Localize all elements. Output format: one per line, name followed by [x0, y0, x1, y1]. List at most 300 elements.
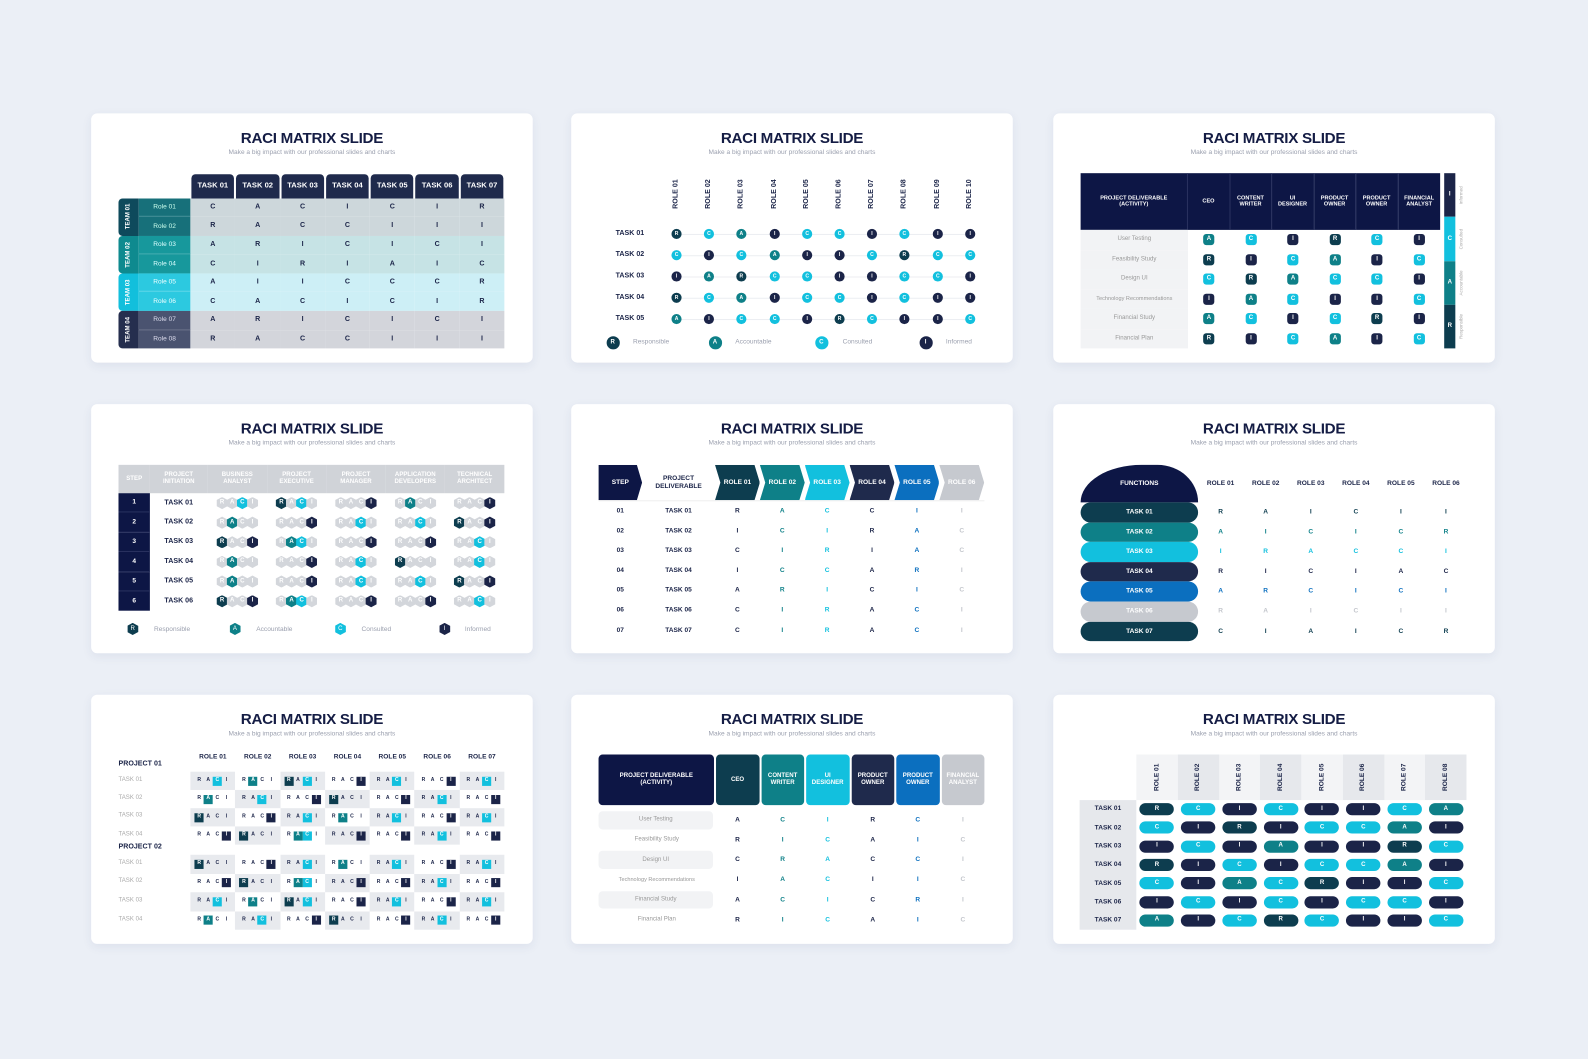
table: C	[418, 539, 423, 545]
project 02 grid: A	[341, 898, 345, 904]
task header row: TASK 01	[197, 181, 228, 190]
project 01 grid: C	[395, 777, 399, 783]
project 01 grid: I	[316, 795, 317, 801]
project 01 grid: C	[305, 832, 309, 838]
project 01 grid: C	[485, 795, 488, 801]
project 02 grid: R	[287, 916, 291, 922]
project 01 grid: A	[206, 777, 210, 783]
table: R	[1375, 315, 1379, 321]
project 01 grid: R	[287, 832, 291, 838]
project 02 grid: A	[296, 860, 300, 866]
title	[709, 130, 876, 156]
title	[709, 711, 876, 737]
table body: C	[870, 507, 874, 515]
table: 4	[132, 558, 136, 565]
dot grid: I	[937, 295, 939, 301]
pills	[1139, 803, 1464, 927]
project 02 grid: R	[466, 898, 470, 904]
project 02 grid: I	[450, 879, 452, 885]
project 01 grid: I	[226, 832, 227, 838]
project 02 grid: C	[216, 860, 219, 866]
matrix body: A	[210, 316, 215, 323]
legend: Informed	[946, 338, 972, 345]
table: 3	[132, 538, 136, 545]
project 01 grid: R	[197, 813, 201, 819]
table: A	[467, 500, 472, 506]
table body: I	[916, 507, 918, 515]
pills: I	[1197, 824, 1199, 830]
table: OWNER	[1366, 202, 1387, 208]
legend: I	[444, 626, 445, 632]
header: PROJECT DELIVERABLE	[620, 773, 693, 779]
project 01 grid: A	[296, 795, 300, 801]
project 02 grid: I	[495, 916, 496, 922]
matrix body: C	[390, 297, 395, 305]
table: A	[230, 500, 234, 506]
table: ANALYST	[223, 479, 251, 485]
project 02 grid: A	[296, 916, 300, 922]
table body: C	[735, 607, 740, 614]
table: TASK 05	[164, 578, 193, 585]
title: RACI MATRIX SLIDE	[241, 130, 383, 147]
table: R	[279, 500, 284, 506]
project 02 grid: R	[332, 916, 336, 922]
table	[118, 464, 504, 611]
functions column: TASK 04	[1126, 568, 1153, 575]
project 01 grid: I	[495, 777, 496, 783]
dot grid: A	[675, 316, 678, 322]
title: Make a big impact with our professional slides and charts	[709, 440, 875, 447]
role headers: ROLE 06	[836, 180, 843, 209]
project 01 grid: R	[377, 832, 380, 838]
table: A	[467, 598, 472, 604]
legend: C	[819, 339, 824, 345]
dot grid: I	[774, 295, 775, 301]
project 02 grid: A	[206, 879, 210, 885]
table: R	[457, 500, 462, 506]
task labels: TASK 05	[1095, 880, 1121, 887]
pills: C	[1279, 806, 1283, 812]
project 02 grid: C	[216, 898, 219, 904]
legend: Informed	[465, 626, 491, 633]
role table: R	[1263, 548, 1268, 555]
body: Feasibility Study	[635, 837, 679, 843]
body: Design UI	[642, 857, 669, 863]
project 02 grid: I	[226, 898, 227, 904]
task header row: TASK 07	[467, 181, 497, 190]
table: PROJECT DELIVERABLE	[1100, 195, 1167, 201]
table: C	[299, 598, 304, 604]
table: A	[289, 578, 294, 584]
table: A	[408, 519, 412, 525]
project 02 grid: C	[260, 898, 264, 904]
table: A	[1207, 315, 1211, 321]
project 02 grid: I	[316, 898, 317, 904]
role headers: ROLE 03	[738, 180, 745, 209]
project 01 grid: C	[260, 813, 264, 819]
body: I	[737, 876, 738, 883]
matrix body: R	[479, 279, 485, 286]
table body: 07	[617, 627, 624, 634]
role table: C	[1399, 628, 1403, 635]
project 02 grid: A	[386, 860, 390, 866]
panel: colored header matrix	[571, 695, 1013, 944]
task header row: TASK 05	[377, 181, 408, 190]
project 02 grid: R	[242, 860, 246, 866]
table: C	[418, 519, 423, 525]
body: I	[917, 836, 919, 843]
matrix body: R	[479, 297, 485, 305]
project 02 grid: R	[422, 898, 425, 904]
project 02 grid: C	[305, 898, 309, 904]
role headers: ROLE 03	[1236, 764, 1243, 791]
table: C	[1291, 296, 1295, 302]
body: Financial Plan	[638, 916, 676, 922]
table: R	[339, 500, 343, 506]
body: C	[960, 876, 965, 883]
project 02 grid: A	[341, 879, 345, 885]
matrix body: C	[390, 279, 395, 286]
matrix body: I	[302, 316, 304, 323]
legend: Responsible	[154, 626, 190, 633]
table: I	[370, 598, 372, 604]
side legend bar	[1444, 173, 1464, 348]
pills: C	[1279, 880, 1283, 886]
table: A	[230, 558, 234, 565]
task labels	[616, 230, 644, 323]
project 02 grid: C	[395, 898, 399, 904]
project 02 grid: R	[377, 916, 380, 922]
role headers: ROLE 07	[468, 754, 496, 761]
table body: C	[735, 627, 740, 634]
table body: I	[781, 607, 783, 614]
task header row: TASK 04	[332, 181, 363, 190]
pills: I	[1197, 861, 1199, 868]
table: C	[1291, 335, 1295, 341]
table: I	[1376, 256, 1378, 262]
project labels	[118, 760, 162, 923]
chevron header: ROLE 03	[813, 479, 841, 486]
table body: C	[959, 547, 964, 554]
table: I	[370, 539, 372, 545]
role table: C	[1399, 548, 1403, 555]
chevron header: ROLE 06	[948, 479, 975, 486]
project 02 grid: A	[431, 879, 434, 885]
project 02 grid: C	[350, 860, 354, 866]
role table: A	[1308, 548, 1313, 555]
project labels: TASK 04	[118, 917, 142, 923]
matrix body: R	[210, 222, 215, 229]
project 01 grid: R	[332, 813, 336, 819]
project 02 grid: R	[287, 860, 291, 866]
table: TASK 01	[164, 499, 193, 506]
table body: A	[870, 567, 874, 574]
task labels: TASK 04	[1095, 861, 1121, 868]
table: I	[1250, 335, 1252, 341]
role table: ROLE 05	[1387, 480, 1415, 487]
role headers: ROLE 07	[868, 180, 875, 209]
project 01 grid: I	[316, 777, 317, 783]
table: I	[1250, 256, 1252, 262]
project 01 grid	[190, 772, 504, 844]
side legend bar: R	[1448, 323, 1452, 329]
project 02 grid: R	[332, 860, 336, 866]
table body: TASK 07	[665, 627, 692, 634]
project 01 grid: I	[316, 832, 317, 838]
team labels: TEAM 04	[125, 317, 131, 343]
table body: R	[825, 547, 830, 554]
panel: project matrix	[91, 695, 533, 944]
project 02 grid: I	[495, 879, 496, 885]
table: C	[299, 539, 304, 545]
table body: TASK 04	[665, 567, 692, 574]
project 02 grid: R	[466, 916, 470, 922]
pills: C	[1402, 806, 1407, 812]
table: A	[467, 558, 472, 565]
project 01 grid: A	[251, 813, 255, 819]
table body: A	[870, 607, 874, 614]
project labels: TASK 01	[118, 860, 142, 866]
table: A	[230, 519, 234, 525]
table: I	[489, 578, 491, 584]
dot grid: C	[903, 295, 906, 301]
project 02 grid: A	[251, 879, 255, 885]
table: C	[1249, 315, 1253, 321]
body: I	[782, 836, 784, 843]
table body: 02	[617, 527, 624, 534]
matrix body: A	[255, 222, 260, 229]
matrix body: C	[435, 241, 440, 248]
table: PRODUCT	[1321, 195, 1348, 201]
functions column: TASK 01	[1126, 508, 1153, 516]
pills: I	[1280, 824, 1282, 830]
project 02 grid: I	[405, 879, 407, 885]
table body: C	[735, 547, 740, 554]
header: UI	[825, 773, 831, 779]
pills: C	[1361, 824, 1366, 830]
table: I	[311, 519, 313, 525]
role table: I	[1445, 508, 1447, 516]
matrix body: C	[345, 279, 350, 286]
task labels: TASK 05	[616, 315, 644, 323]
project 01 grid: R	[377, 777, 380, 783]
role headers: ROLE 04	[1277, 764, 1284, 791]
title	[1191, 711, 1358, 737]
project 01 grid: I	[495, 813, 496, 819]
table: I	[311, 558, 313, 565]
matrix body: R	[210, 335, 215, 342]
dot grid: I	[839, 252, 840, 258]
table: I	[1292, 236, 1294, 242]
table: C	[359, 558, 363, 565]
pills: I	[1362, 880, 1364, 886]
pills: R	[1237, 824, 1242, 830]
project 01 grid: C	[350, 777, 354, 783]
dot grid: I	[871, 273, 873, 280]
matrix body: I	[391, 335, 393, 342]
body: C	[870, 896, 875, 903]
project 01 grid: I	[226, 813, 227, 819]
project 02 grid: C	[305, 860, 309, 866]
project 02 grid: A	[386, 898, 390, 904]
table: A	[349, 578, 353, 584]
table: R	[457, 519, 462, 525]
chevron header: ROLE 01	[724, 479, 751, 486]
project 02 grid: C	[395, 860, 399, 866]
project 02 grid: R	[422, 860, 425, 866]
table body: I	[737, 527, 738, 534]
table: R	[398, 539, 402, 545]
table: A	[408, 539, 412, 545]
dot grid: I	[806, 316, 808, 322]
dot grid: I	[970, 231, 971, 237]
matrix body: I	[346, 203, 348, 210]
dot grid: C	[805, 273, 809, 280]
dot grid: I	[904, 316, 905, 322]
table: R	[279, 598, 284, 604]
role table: C	[1353, 508, 1358, 516]
project 01 grid: I	[405, 813, 407, 819]
matrix body: I	[302, 279, 304, 286]
pills: C	[1237, 917, 1242, 923]
pills: C	[1402, 898, 1407, 905]
role headers: ROLE 04	[770, 180, 777, 209]
project 02 grid: R	[377, 860, 380, 866]
matrix body: C	[210, 203, 215, 210]
project 01 grid: R	[466, 795, 470, 801]
project 01 grid: I	[226, 777, 227, 783]
project 01 grid: A	[341, 832, 345, 838]
table body: A	[915, 527, 919, 534]
project 01 grid: A	[296, 777, 300, 783]
matrix body: I	[436, 203, 438, 210]
table: R	[279, 519, 284, 525]
body: R	[735, 916, 740, 923]
dot grid: I	[871, 231, 873, 237]
role headers: ROLE 03	[289, 754, 316, 761]
project 02 grid: A	[206, 898, 210, 904]
project 01 grid: R	[197, 832, 201, 838]
team labels: TEAM 03	[125, 279, 131, 305]
title	[229, 711, 395, 737]
dot grid: R	[740, 273, 743, 280]
table: C	[240, 558, 245, 565]
role headers: ROLE 02	[1194, 764, 1202, 791]
pills: C	[1237, 861, 1242, 868]
project 01 grid: C	[350, 813, 354, 819]
pills: I	[1280, 861, 1282, 868]
header: (ACTIVITY)	[640, 780, 672, 786]
table: C	[1249, 236, 1253, 242]
table: PRODUCT	[1363, 195, 1390, 201]
pills: C	[1444, 880, 1448, 886]
chevron header: DELIVERABLE	[655, 483, 702, 490]
dot grid: A	[740, 295, 743, 301]
role headers: ROLE 01	[199, 754, 227, 761]
dot grid: C	[968, 252, 972, 258]
table: R	[457, 539, 462, 545]
team labels: TEAM 02	[125, 242, 131, 267]
project 02 grid: R	[242, 879, 246, 885]
project 01 grid: R	[242, 832, 246, 838]
table: C	[418, 558, 423, 565]
project 02 grid: A	[341, 916, 345, 922]
role table: R	[1444, 528, 1448, 535]
pills: I	[1321, 843, 1323, 849]
task labels: TASK 04	[616, 294, 644, 301]
table: A	[467, 519, 472, 525]
project 01 grid: C	[305, 795, 309, 801]
body: I	[872, 876, 874, 883]
table: R	[398, 578, 402, 584]
role table: ROLE 06	[1432, 480, 1460, 487]
side legend bar: Responsible	[1459, 314, 1464, 339]
matrix body: I	[481, 316, 483, 323]
role table: I	[1400, 608, 1402, 615]
project labels: TASK 02	[118, 878, 142, 884]
matrix body: C	[300, 297, 305, 305]
table: I	[1418, 236, 1420, 242]
project 01 grid: R	[287, 813, 291, 819]
pills: I	[1362, 806, 1364, 812]
role table: C	[1444, 568, 1448, 575]
table: STEP	[126, 476, 142, 482]
dot grid: I	[806, 252, 808, 258]
matrix body: I	[481, 241, 483, 248]
table body: I	[916, 587, 918, 594]
matrix body: C	[435, 316, 440, 323]
table: I	[252, 539, 253, 545]
table: I	[370, 558, 372, 565]
project 02 grid: I	[360, 916, 362, 922]
dot grid: I	[676, 273, 677, 280]
project 01 grid: A	[431, 777, 434, 783]
table: I	[370, 519, 372, 525]
project 02 grid: C	[395, 879, 399, 885]
panel: functions matrix	[1053, 404, 1495, 653]
project 02 grid: C	[305, 916, 309, 922]
table: R	[279, 539, 284, 545]
header: ANALYST	[949, 780, 977, 786]
project 02 grid: A	[476, 860, 479, 866]
table: R	[398, 519, 402, 525]
project 02 grid: A	[251, 898, 255, 904]
table: APPLICATION	[395, 472, 436, 478]
dot grid: I	[708, 316, 710, 322]
table body: A	[735, 587, 740, 594]
project 02 grid: C	[440, 898, 444, 904]
project 01 grid: A	[431, 813, 434, 819]
table: A	[289, 519, 294, 525]
project 01 grid: C	[395, 813, 399, 819]
role table: A	[1263, 608, 1268, 615]
legend: I	[925, 339, 927, 345]
project 02 grid: I	[360, 898, 362, 904]
matrix body: R	[255, 241, 260, 248]
body: R	[870, 816, 875, 823]
project 02 grid: C	[350, 916, 354, 922]
role headers: ROLE 06	[1360, 764, 1367, 791]
project 02 grid: R	[422, 879, 425, 885]
table: Feasibility Study	[1112, 256, 1156, 262]
project 02 grid: I	[316, 916, 317, 922]
title: Make a big impact with our professional slides and charts	[1191, 440, 1357, 447]
table: R	[398, 558, 402, 565]
project 02 grid: A	[206, 916, 210, 922]
role labels: Role 05	[153, 278, 176, 286]
pills: R	[1402, 843, 1407, 849]
role table: I	[1310, 508, 1312, 516]
